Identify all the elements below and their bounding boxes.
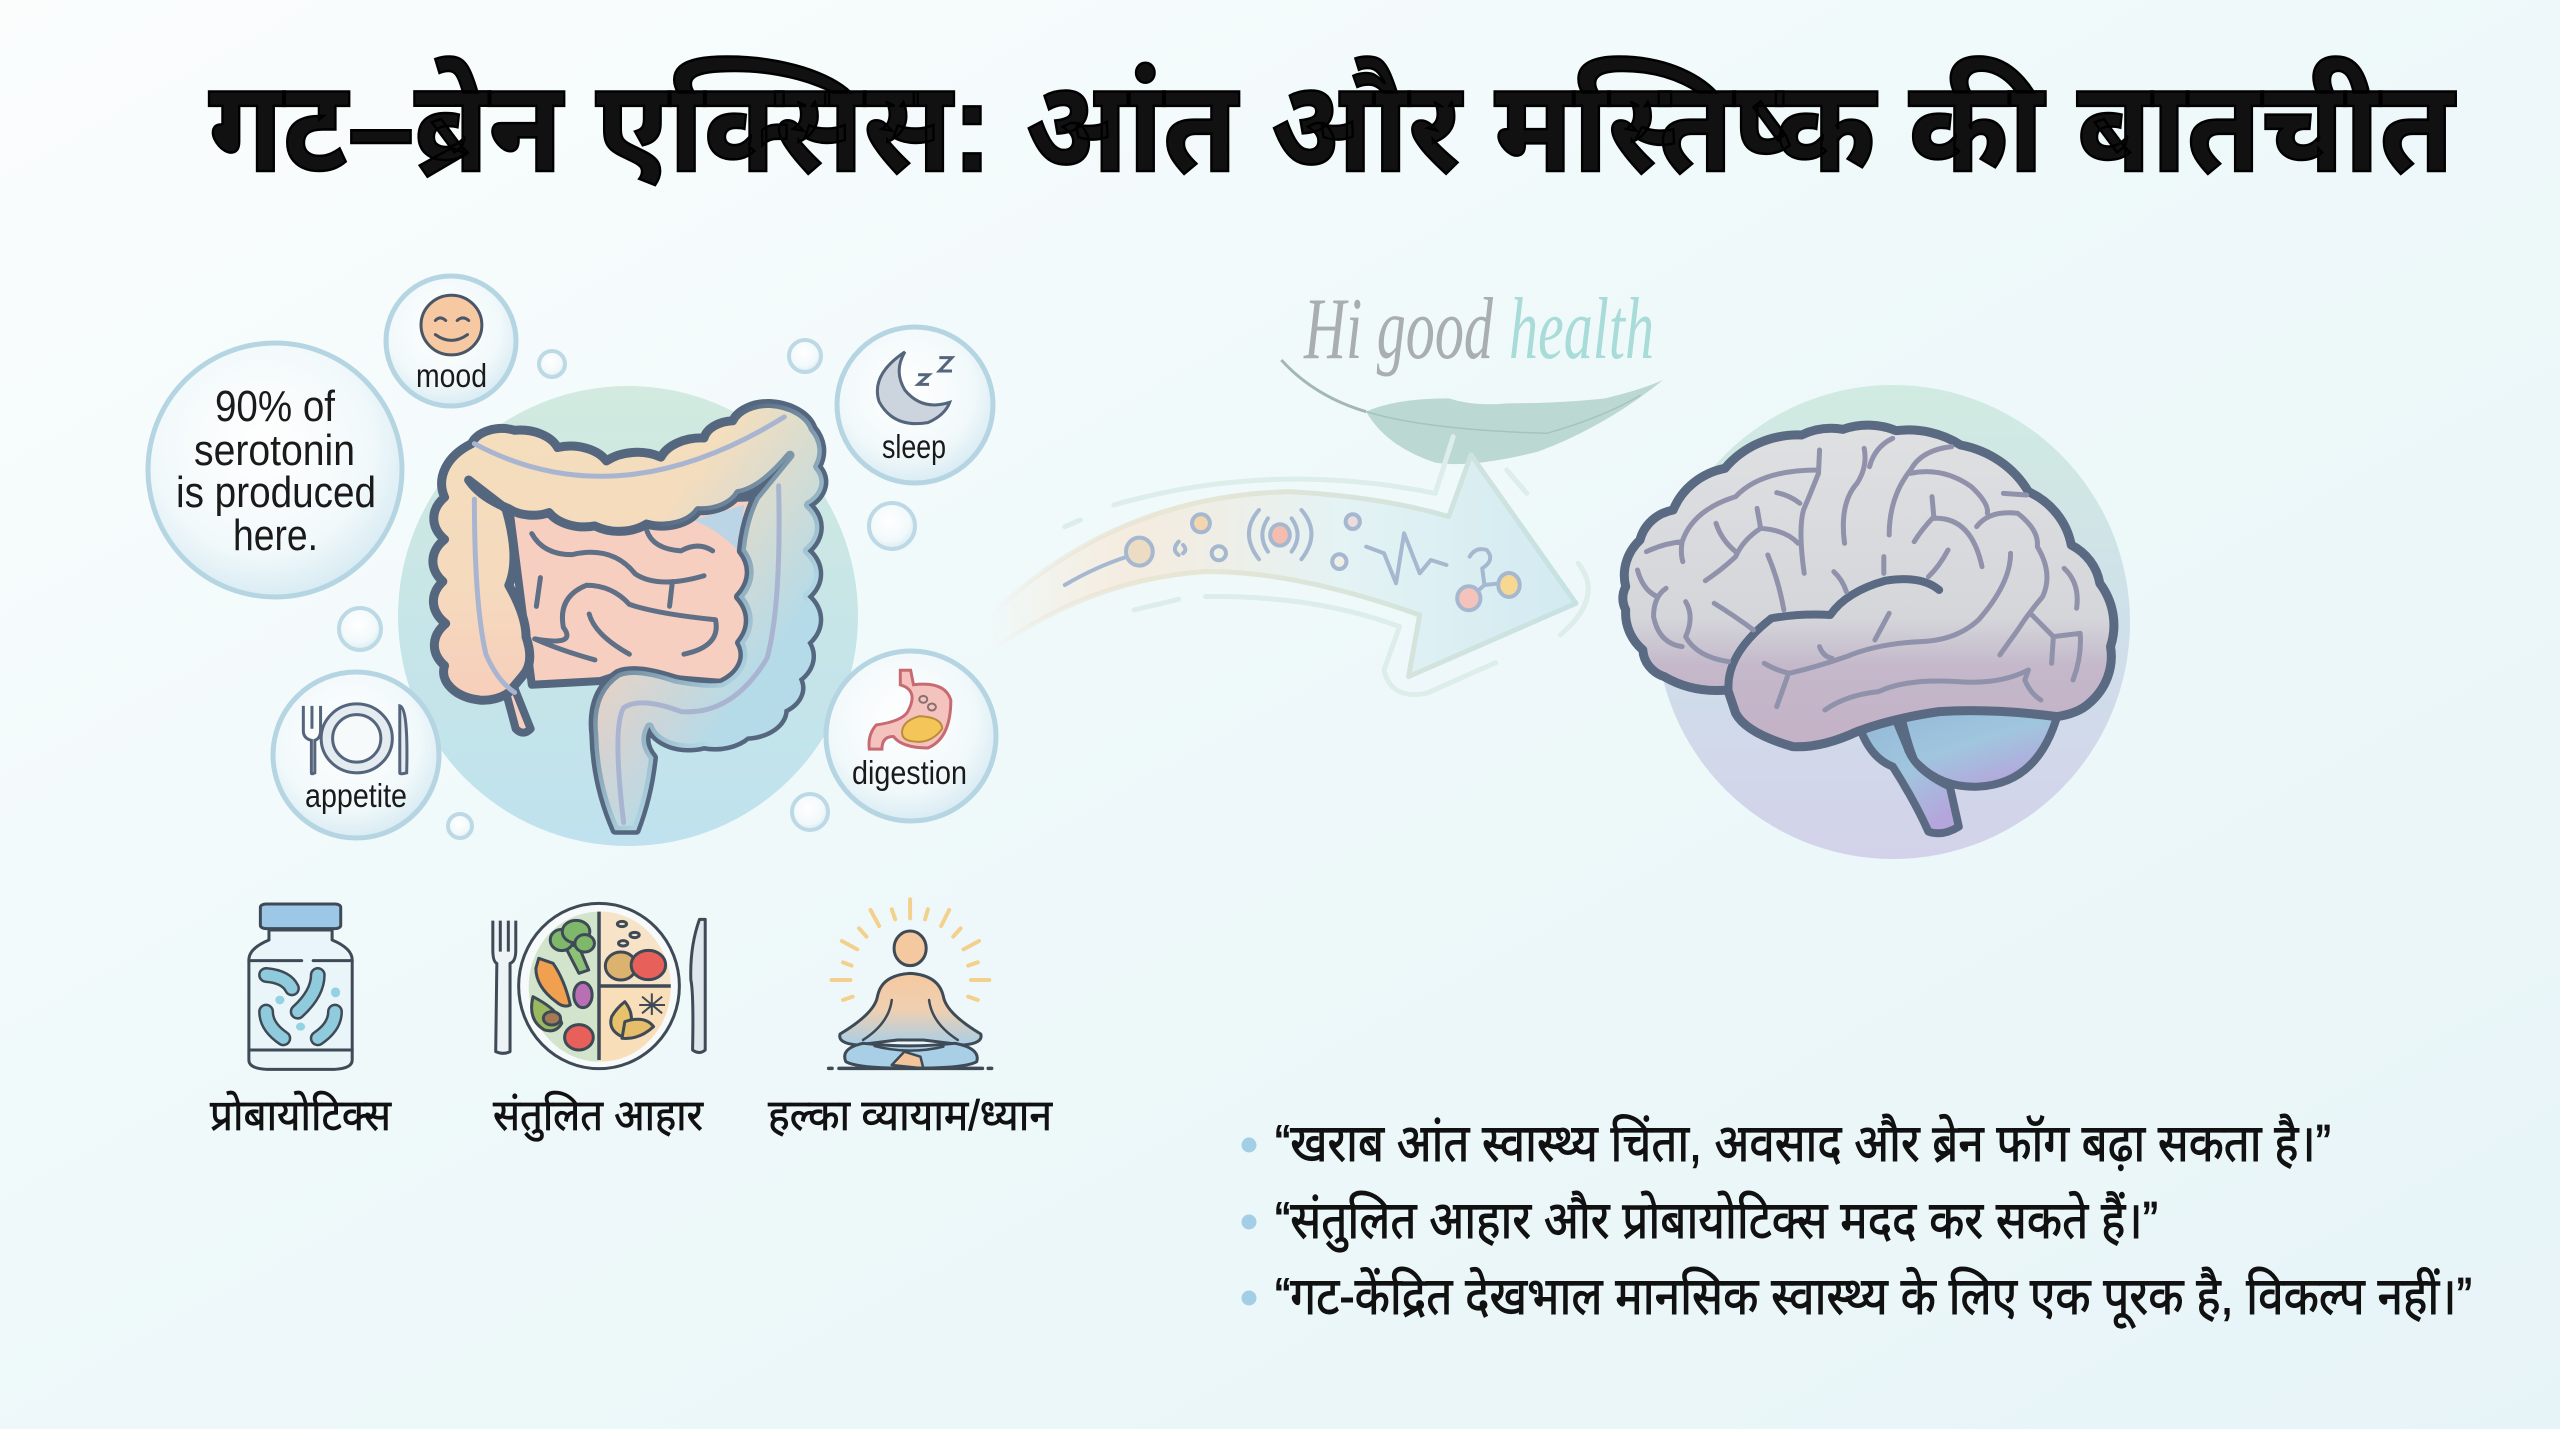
panel: mood bubble	[386, 276, 516, 406]
panel: light exercise and meditation	[768, 899, 1053, 1140]
small floating bubbles	[339, 340, 915, 838]
title: गट–ब्रेन एक्सिस: आंत और मस्तिष्क की बातचीत	[209, 56, 2456, 199]
panel: appetite bubble: appetite	[305, 777, 407, 814]
panel: serotonin bubble: is produced	[176, 468, 376, 517]
signal icons	[1065, 510, 1520, 610]
bullet point 2: “संतुलित आहार और प्रोबायोटिक्स मदद कर सकते हैं।”	[1275, 1191, 2158, 1253]
gut background circle	[398, 386, 858, 846]
panel: serotonin bubble: serotonin	[194, 426, 355, 475]
logo: Hi good health: Hi good	[1303, 281, 1494, 378]
panel: mood bubble: mood	[416, 357, 487, 394]
panel: digestion bubble: digestion	[852, 754, 967, 791]
icon: moon	[877, 352, 952, 424]
text block: key points	[1242, 1114, 2472, 1329]
panel: light exercise and meditation: हल्का व्यायाम/ध्यान	[768, 1092, 1053, 1140]
bullet point 1: “खराब आंत स्वास्थ्य चिंता, अवसाद और ब्रेन फॉग बढ़ा सकता है।”	[1275, 1114, 2331, 1173]
panel: brain illustration	[1623, 385, 2130, 859]
icon: meditating person	[829, 899, 992, 1068]
panel: serotonin bubble: 90% of	[215, 382, 336, 431]
arrow: gut to brain signal	[989, 437, 1588, 695]
panel: appetite bubble	[273, 672, 439, 838]
panel: balanced diet	[493, 903, 705, 1142]
icon: leaf	[1281, 360, 1663, 464]
logo: Hi good health	[1281, 281, 1663, 464]
panel: serotonin bubble: here.	[233, 511, 318, 560]
panel: probiotics	[210, 904, 392, 1140]
logo: Hi good health: health	[1509, 281, 1654, 378]
icon: intestines	[433, 403, 824, 830]
brain background circle	[1656, 385, 2130, 859]
panel: probiotics: प्रोबायोटिक्स	[210, 1091, 392, 1140]
panel: balanced diet: संतुलित आहार	[493, 1091, 704, 1142]
panel: sleep bubble	[837, 327, 993, 483]
icon: stomach	[869, 670, 951, 749]
icon: plate and cutlery	[303, 704, 407, 774]
icon: smiley	[421, 295, 482, 355]
icon: probiotic bottle	[249, 904, 352, 1069]
icon: brain	[1623, 425, 2114, 833]
icon: food plate	[493, 903, 705, 1069]
panel: serotonin bubble	[148, 343, 402, 597]
panel: sleep bubble: sleep	[882, 428, 946, 465]
panel: gut illustration	[398, 386, 858, 846]
panel: digestion bubble	[826, 651, 996, 821]
